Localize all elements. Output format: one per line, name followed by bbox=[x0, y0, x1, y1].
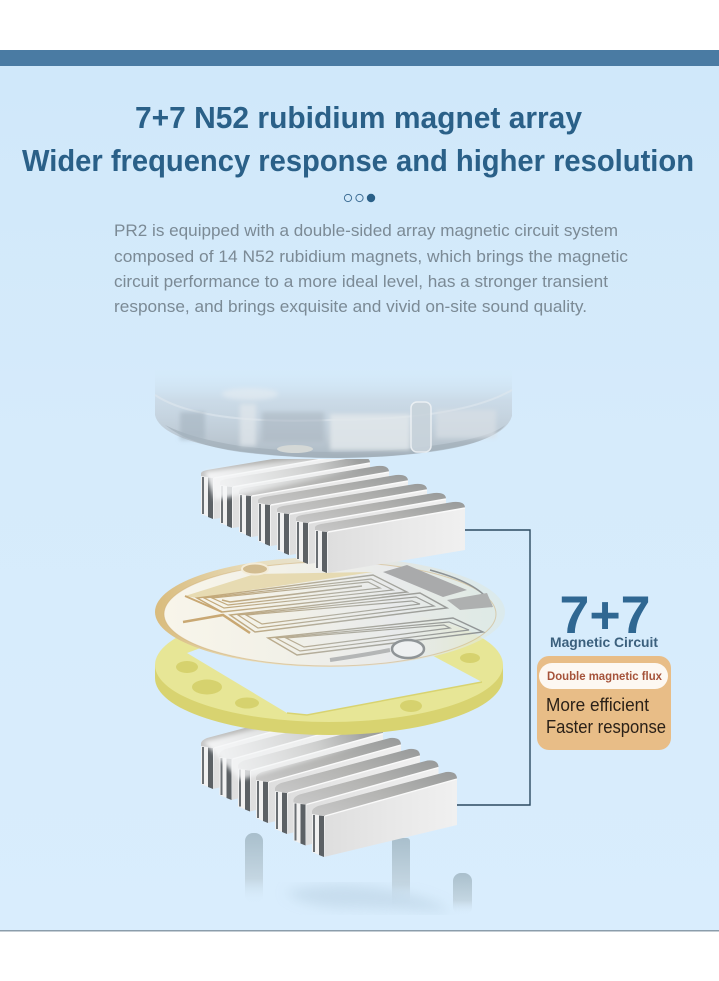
centre opening bbox=[187, 600, 482, 715]
caption: Magnetic Circuit bbox=[550, 634, 658, 650]
description text: response, and brings exquisite and vivid on-site sound quality. bbox=[114, 297, 587, 316]
bottom rule bbox=[0, 930, 719, 932]
circuit disc bbox=[155, 557, 505, 667]
through holes bbox=[242, 564, 268, 574]
big number: 7+7 bbox=[560, 586, 650, 645]
yellow ring gasket bbox=[155, 600, 503, 735]
description text: PR2 is equipped with a double-sided array magnetic circuit system bbox=[114, 221, 618, 240]
description text bbox=[114, 221, 629, 316]
title: Wider frequency response and higher resolution bbox=[22, 143, 694, 178]
white pill bbox=[539, 663, 668, 689]
top header band bbox=[0, 50, 719, 66]
ring top surface bbox=[155, 608, 503, 722]
connector bracket bbox=[457, 530, 530, 805]
ring holes bbox=[176, 661, 198, 673]
translucent top housing bbox=[155, 368, 512, 458]
coil traces bbox=[183, 570, 492, 655]
title bbox=[22, 100, 694, 178]
title: 7+7 N52 rubidium magnet array bbox=[135, 100, 583, 135]
callout: 7+7 magnetic circuit: Faster response bbox=[546, 717, 666, 737]
description text: circuit performance to a more ideal level, has a stronger transient bbox=[114, 272, 608, 291]
callout: 7+7 magnetic circuit bbox=[537, 586, 671, 750]
pill label: Double magnetic flux bbox=[547, 669, 662, 683]
ring side wall bbox=[155, 665, 503, 735]
upper magnet stack bbox=[201, 448, 465, 573]
lower support pins bbox=[245, 833, 472, 915]
orange box bbox=[537, 656, 671, 750]
pagination dots bbox=[344, 194, 375, 202]
contact pads bbox=[383, 565, 467, 597]
gold corner fill bbox=[185, 572, 373, 598]
lower magnet stack bbox=[201, 704, 457, 857]
benefits: More efficient bbox=[546, 695, 649, 715]
description text: composed of 14 N52 rubidium magnets, which brings the magnetic bbox=[114, 247, 629, 266]
